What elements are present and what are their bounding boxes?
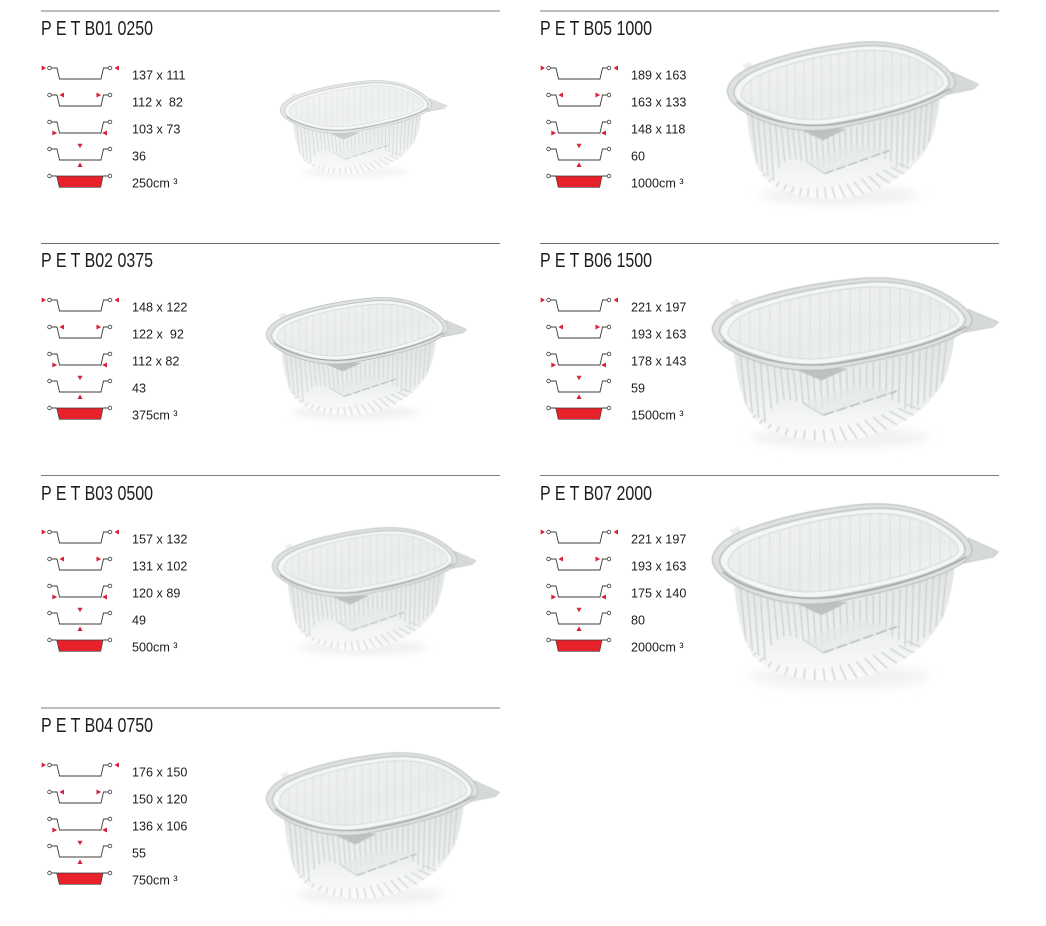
icon: base size: [48, 120, 112, 136]
icon: inner rim size: [48, 790, 112, 803]
panel: PET B04 0750: [41, 708, 500, 905]
value: outer rim size: 157 x 132: [132, 531, 187, 547]
icon: volume: [48, 406, 112, 419]
icon: base size: [48, 584, 112, 600]
title: PET B03 0500: P E T B03 0500: [41, 482, 153, 504]
value: inner rim size: 193 x 163: [631, 558, 686, 574]
value: height: 60: [631, 148, 645, 164]
value: outer rim size: 221 x 197: [631, 299, 686, 315]
value: base size: 112 x 82: [132, 353, 179, 369]
value: volume: 375cm ³: [132, 407, 178, 423]
value: base size: 120 x 89: [132, 585, 180, 601]
icon: base size: [48, 817, 112, 832]
icon: base size: [48, 352, 112, 368]
value: height: 43: [132, 380, 146, 396]
panel: PET B02 0375: [41, 244, 500, 423]
value: volume: 1000cm ³: [631, 175, 684, 191]
icon: height: [547, 376, 611, 399]
icon: outer rim size: [42, 66, 119, 79]
icon: inner rim size: [48, 556, 112, 570]
value: volume: 1500cm ³: [631, 407, 684, 423]
photo: container B04: [266, 753, 499, 905]
icon: outer rim size: [541, 530, 618, 543]
value: base size: 175 x 140: [631, 585, 686, 601]
photo: container B07: [712, 504, 999, 688]
value: volume: 500cm ³: [132, 639, 178, 655]
panel: PET B06 1500: [540, 244, 999, 448]
title: PET B05 1000: P E T B05 1000: [540, 17, 652, 39]
value: base size: 103 x 73: [132, 121, 180, 137]
title: PET B02 0375: P E T B02 0375: [41, 249, 153, 271]
value: base size: 148 x 118: [631, 121, 685, 137]
photo: container B06: [712, 278, 999, 448]
icon: height: [48, 144, 112, 167]
icon: outer rim size: [42, 298, 119, 311]
value: volume: 250cm ³: [132, 175, 178, 191]
value: inner rim size: 112 x 82: [132, 94, 183, 110]
icon: height: [547, 144, 611, 167]
value: height: 49: [132, 612, 146, 628]
icon: volume: [48, 638, 112, 651]
photo: container B03: [272, 528, 476, 655]
icon: base size: [547, 352, 611, 368]
icon: volume: [547, 638, 611, 651]
icon: inner rim size: [48, 324, 112, 338]
icon: inner rim size: [547, 92, 611, 106]
value: inner rim size: 122 x 92: [132, 326, 184, 342]
icon: outer rim size: [42, 762, 119, 776]
icon: height: [48, 608, 112, 631]
icon: volume: [547, 174, 611, 187]
icon: inner rim size: [547, 556, 611, 570]
panel: PET B07 2000: [540, 476, 999, 688]
title: PET B07 2000: P E T B07 2000: [540, 482, 652, 504]
icon: volume: [48, 871, 112, 884]
photo: container B05: [727, 42, 978, 205]
icon: base size: [547, 584, 611, 600]
value: outer rim size: 189 x 163: [631, 67, 686, 83]
value: base size: 136 x 106: [132, 818, 187, 834]
value: height: 55: [132, 845, 146, 861]
icon: inner rim size: [48, 92, 112, 106]
value: volume: 2000cm ³: [631, 639, 684, 655]
icon: height: [547, 608, 611, 631]
icon: inner rim size: [547, 324, 611, 338]
value: outer rim size: 148 x 122: [132, 299, 187, 315]
photo: container B02: [266, 298, 467, 420]
value: inner rim size: 131 x 102: [132, 558, 187, 574]
icon: outer rim size: [541, 298, 618, 311]
icon: volume: [48, 174, 112, 187]
icon: base size: [547, 120, 611, 136]
value: outer rim size: 221 x 197: [631, 531, 686, 547]
icon: height: [48, 376, 112, 399]
icon: height: [48, 841, 112, 864]
value: inner rim size: 193 x 163: [631, 326, 686, 342]
icon: volume: [547, 406, 611, 419]
icon: outer rim size: [541, 66, 618, 79]
value: outer rim size: 137 x 111: [132, 67, 185, 83]
icon: outer rim size: [42, 530, 119, 543]
photo: container B01: [280, 80, 447, 178]
panel: PET B03 0500: [41, 476, 500, 655]
panel: PET B01 0250: [41, 11, 500, 191]
value: height: 80: [631, 612, 645, 628]
value: volume: 750cm ³: [132, 872, 178, 888]
title: PET B04 0750: P E T B04 0750: [41, 714, 153, 736]
value: outer rim size: 176 x 150: [132, 764, 187, 780]
title: PET B01 0250: P E T B01 0250: [41, 17, 153, 39]
value: inner rim size: 163 x 133: [631, 94, 686, 110]
value: height: 59: [631, 380, 645, 396]
value: base size: 178 x 143: [631, 353, 686, 369]
panel: PET B05 1000: [540, 11, 999, 205]
value: inner rim size: 150 x 120: [132, 791, 187, 807]
value: height: 36: [132, 148, 146, 164]
title: PET B06 1500: P E T B06 1500: [540, 249, 652, 271]
